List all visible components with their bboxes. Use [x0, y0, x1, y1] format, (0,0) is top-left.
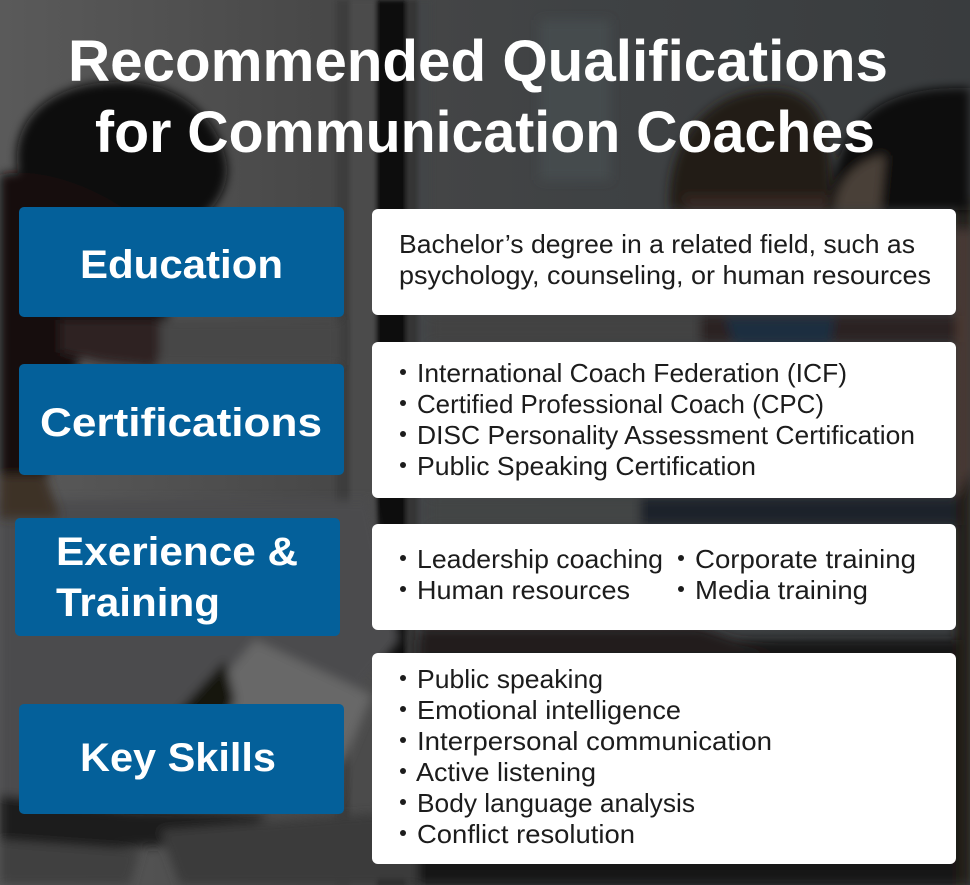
- panel: key skills list: Active listening: [416, 757, 596, 787]
- panel: key skills label: [19, 704, 344, 814]
- panel: experience and training list: Media training: [695, 575, 868, 605]
- title: for Communication Coaches: [95, 100, 875, 165]
- panel: key skills list: Emotional intelligence: [417, 695, 681, 725]
- panel: key skills list: Public speaking: [417, 664, 603, 694]
- panel: certifications list: [372, 342, 956, 498]
- people: right-side heads: [670, 88, 970, 210]
- title: Recommended Qualifications: [68, 29, 888, 94]
- panel: certifications list: DISC Personality Assessment Certification: [417, 420, 915, 450]
- panel: key skills label: Key Skills: [80, 736, 276, 780]
- panel: key skills list: Body language analysis: [417, 788, 695, 818]
- panel: key skills list: Interpersonal communication: [417, 726, 772, 756]
- panel: education detail: [372, 209, 956, 315]
- panel: experience and training label: [15, 518, 340, 636]
- panel: key skills list: [372, 653, 956, 864]
- panel: certifications label: [19, 364, 344, 475]
- title: [68, 29, 888, 165]
- panel: education label: Education: [80, 243, 283, 287]
- panel: key skills list: Conflict resolution: [417, 819, 635, 849]
- panel: education label: [19, 207, 344, 317]
- panel: certifications list: Public Speaking Certification: [417, 451, 756, 481]
- panel: experience and training list: Leadership coaching: [417, 544, 663, 574]
- panel: education detail: Bachelor’s degree in a related field, such as: [399, 229, 915, 259]
- panel: certifications list: Certified Professional Coach (CPC): [417, 389, 824, 419]
- panel: education detail: psychology, counseling, or human resources: [399, 260, 931, 290]
- panel: certifications list: International Coach Federation (ICF): [417, 358, 847, 388]
- panel: experience and training list: Human resources: [417, 575, 630, 605]
- panel: experience and training list: Corporate training: [695, 544, 916, 574]
- panel: experience and training label: Exerience &: [56, 530, 298, 574]
- panel: experience and training list: [372, 524, 956, 630]
- person: back-left hair: [0, 82, 340, 520]
- panel: experience and training label: Training: [56, 581, 220, 625]
- panel: certifications label: Certifications: [40, 401, 322, 445]
